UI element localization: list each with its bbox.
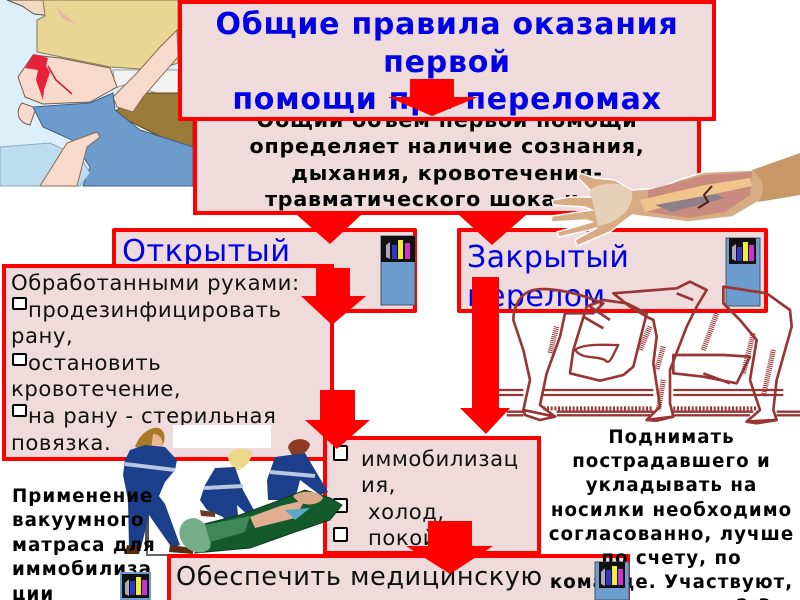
arrow: title to general volume <box>388 79 478 116</box>
text: general volume of first aid: травматического шока и др. <box>265 187 629 211</box>
panel: ensure medical care <box>167 554 630 600</box>
text: open fracture actions: рану, <box>11 323 73 348</box>
bullet markers <box>333 445 348 542</box>
icon: medical care button <box>594 562 630 600</box>
text: lifting instructions: носилки необходимо <box>551 500 792 521</box>
text: lifting instructions: согласованно, лучше <box>549 524 794 545</box>
text: closed fracture actions <box>361 446 519 550</box>
arrow: actions to immobilisation <box>305 390 370 449</box>
text: lifting instructions: команде. Участвуют, <box>550 572 793 593</box>
panel: open fracture actions <box>2 264 334 461</box>
text: open fracture actions: Обработанными руками: <box>11 270 300 295</box>
text: vacuum mattress note <box>12 486 156 600</box>
text: closed fracture actions: иммобилизац <box>361 446 519 471</box>
arrow: open fracture to actions <box>301 268 366 325</box>
text: vacuum mattress note: вакуумного <box>12 510 144 531</box>
text: open fracture actions: повязка. <box>11 430 111 455</box>
icon: open fracture button <box>380 236 416 306</box>
panel: closed fracture actions <box>323 436 541 555</box>
title: помощи при переломах <box>232 82 662 117</box>
title: Общие правила оказания <box>216 7 678 42</box>
text: open fracture actions: кровотечение, <box>11 376 181 401</box>
text: closed fracture actions: холод, <box>368 499 445 524</box>
text: closed fracture actions: ия, <box>361 472 396 497</box>
text: lifting instructions <box>549 427 794 600</box>
icon: vacuum mattress button <box>120 572 151 600</box>
text: open fracture actions: на рану - стерильная <box>28 403 276 428</box>
text: general volume of first aid: определяет наличие сознания, <box>250 134 644 158</box>
text: lifting instructions: по счету, по <box>601 548 742 569</box>
illustration: wound on the back <box>0 0 193 186</box>
icon: closed fracture button <box>726 238 760 306</box>
text: vacuum mattress note: матраса для <box>12 535 156 556</box>
arrow: general volume to closed fracture <box>459 215 526 245</box>
text: open fracture actions: остановить <box>28 350 161 375</box>
panel: closed fracture <box>457 228 768 313</box>
text: open fracture actions: продезинфицировать <box>28 297 282 322</box>
panel: open fracture <box>112 228 417 313</box>
text: open fracture actions <box>11 270 300 455</box>
text: general volume of first aid: дыхания, кровотечения- <box>291 161 603 185</box>
illustration: people lifting a casualty onto a stretcher <box>499 280 800 425</box>
text: lifting instructions: пострадавшего и <box>572 451 771 472</box>
text: vacuum mattress note: Применение <box>12 486 153 507</box>
box: title <box>178 0 716 121</box>
text: general volume of first aid: Общий объем первой помощи <box>257 108 637 132</box>
heading: closed fracture <box>467 240 629 313</box>
arrow: closed fracture down <box>460 277 510 434</box>
text: lifting instructions: укладывать на <box>586 475 757 496</box>
white patch <box>173 425 271 448</box>
heading: closed fracture: перелом <box>467 279 606 313</box>
illustration: rescuers with vacuum mattress <box>123 428 343 556</box>
illustration: stretcher fill layer <box>490 270 800 430</box>
text: ensure medical care: Обеспечить медицинскую <box>176 562 543 592</box>
bullet markers <box>12 297 27 417</box>
heading: open fracture: Открытый <box>122 234 291 269</box>
text: closed fracture actions: покой <box>368 525 437 550</box>
heading: closed fracture: Закрытый <box>467 240 629 275</box>
arrow: general volume to open fracture <box>297 215 361 244</box>
text: vacuum mattress note: иммобилиза <box>12 559 152 580</box>
title <box>216 7 678 117</box>
arrow: immobilisation to medical care <box>406 521 493 574</box>
text: general volume of first aid <box>250 108 644 211</box>
title: первой <box>383 44 511 80</box>
text: lifting instructions: Поднимать <box>608 427 735 448</box>
box: general volume of first aid <box>193 100 701 215</box>
